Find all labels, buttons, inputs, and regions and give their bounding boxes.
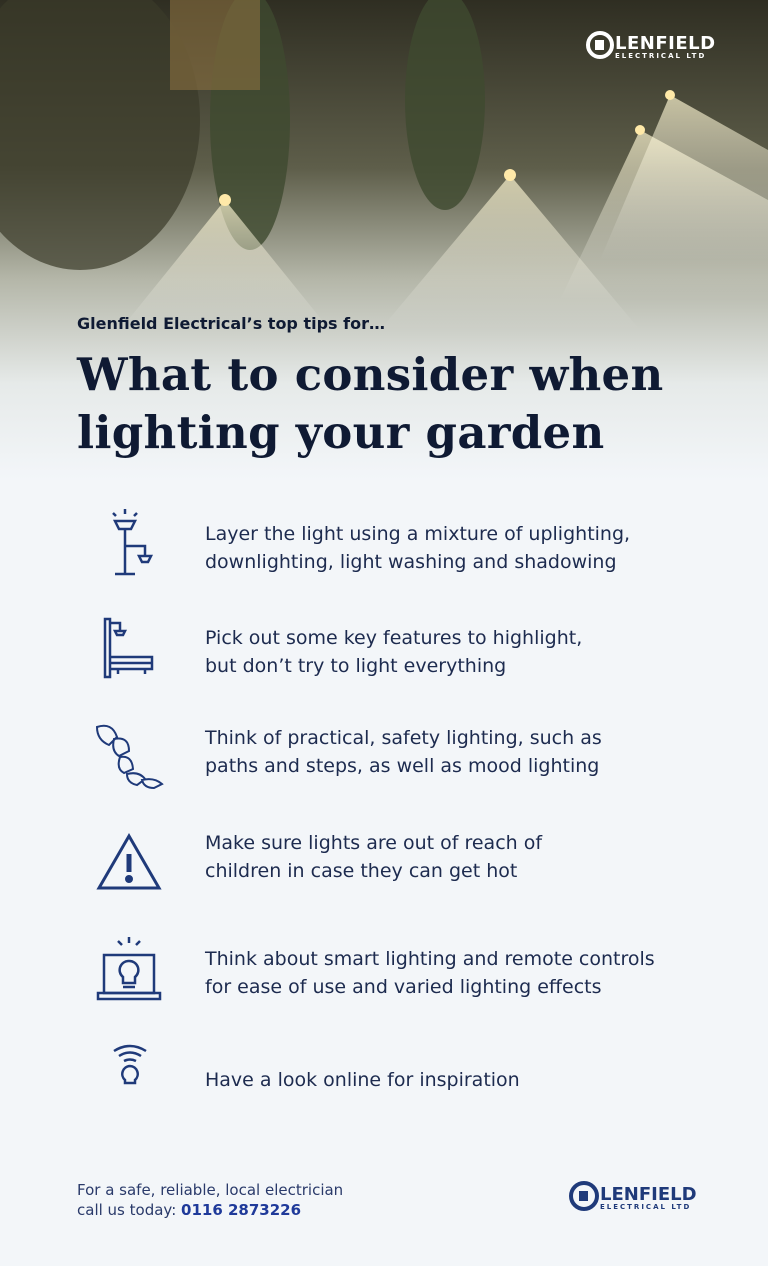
tip 3 text: paths and steps, as well as mood lighting: [205, 755, 599, 777]
tip 4 icon: warning: [96, 833, 162, 890]
tip 6 icon: wifi bulb: [113, 1044, 147, 1084]
tip 1 text: [205, 523, 630, 573]
tip 5 icon: laptop bulb: [96, 937, 162, 1000]
tip 1 text: downlighting, light washing and shadowing: [205, 551, 617, 573]
tip 4 text: Make sure lights are out of reach of: [205, 832, 542, 854]
tip 4 text: children in case they can get hot: [205, 860, 517, 882]
tip 1 text: Layer the light using a mixture of uplighting,: [205, 523, 630, 545]
footer text: call us today: 0116 2873226: [77, 1201, 301, 1219]
title: [76, 348, 663, 459]
tip 3 text: [204, 727, 602, 777]
tip 3 icon: stepping stones: [96, 724, 164, 789]
tip 2 text: Pick out some key features to highlight,: [205, 627, 582, 649]
tip 3 text: Think of practical, safety lighting, such as: [205, 727, 602, 749]
tagline: Glenfield Electrical’s top tips for…: [77, 314, 385, 333]
logo bottom: ELECTRICAL LTD: [600, 1203, 691, 1211]
tip 2 text: [205, 627, 582, 677]
title: lighting your garden: [77, 406, 604, 459]
logo bottom: [569, 1181, 697, 1211]
background photo: [0, 0, 768, 432]
tip 5 text: [204, 948, 655, 998]
tip 5 text: for ease of use and varied lighting effects: [205, 976, 602, 998]
tip 5 text: Think about smart lighting and remote controls: [205, 948, 655, 970]
tip 2 text: but don’t try to light everything: [205, 655, 506, 677]
tip 1 icon: lamp post: [112, 509, 153, 576]
footer text: For a safe, reliable, local electrician: [77, 1181, 343, 1199]
logo bottom: LENFIELD: [600, 1184, 697, 1205]
tip 6 text: Have a look online for inspiration: [205, 1069, 520, 1091]
logo top: LENFIELD: [615, 33, 716, 54]
logo top: [586, 31, 716, 60]
logo top: ELECTRICAL LTD: [615, 52, 706, 60]
title: What to consider when: [77, 348, 663, 401]
tip 4 text: [205, 832, 542, 882]
tip 2 icon: bench: [104, 618, 154, 678]
footer text: [77, 1181, 343, 1219]
